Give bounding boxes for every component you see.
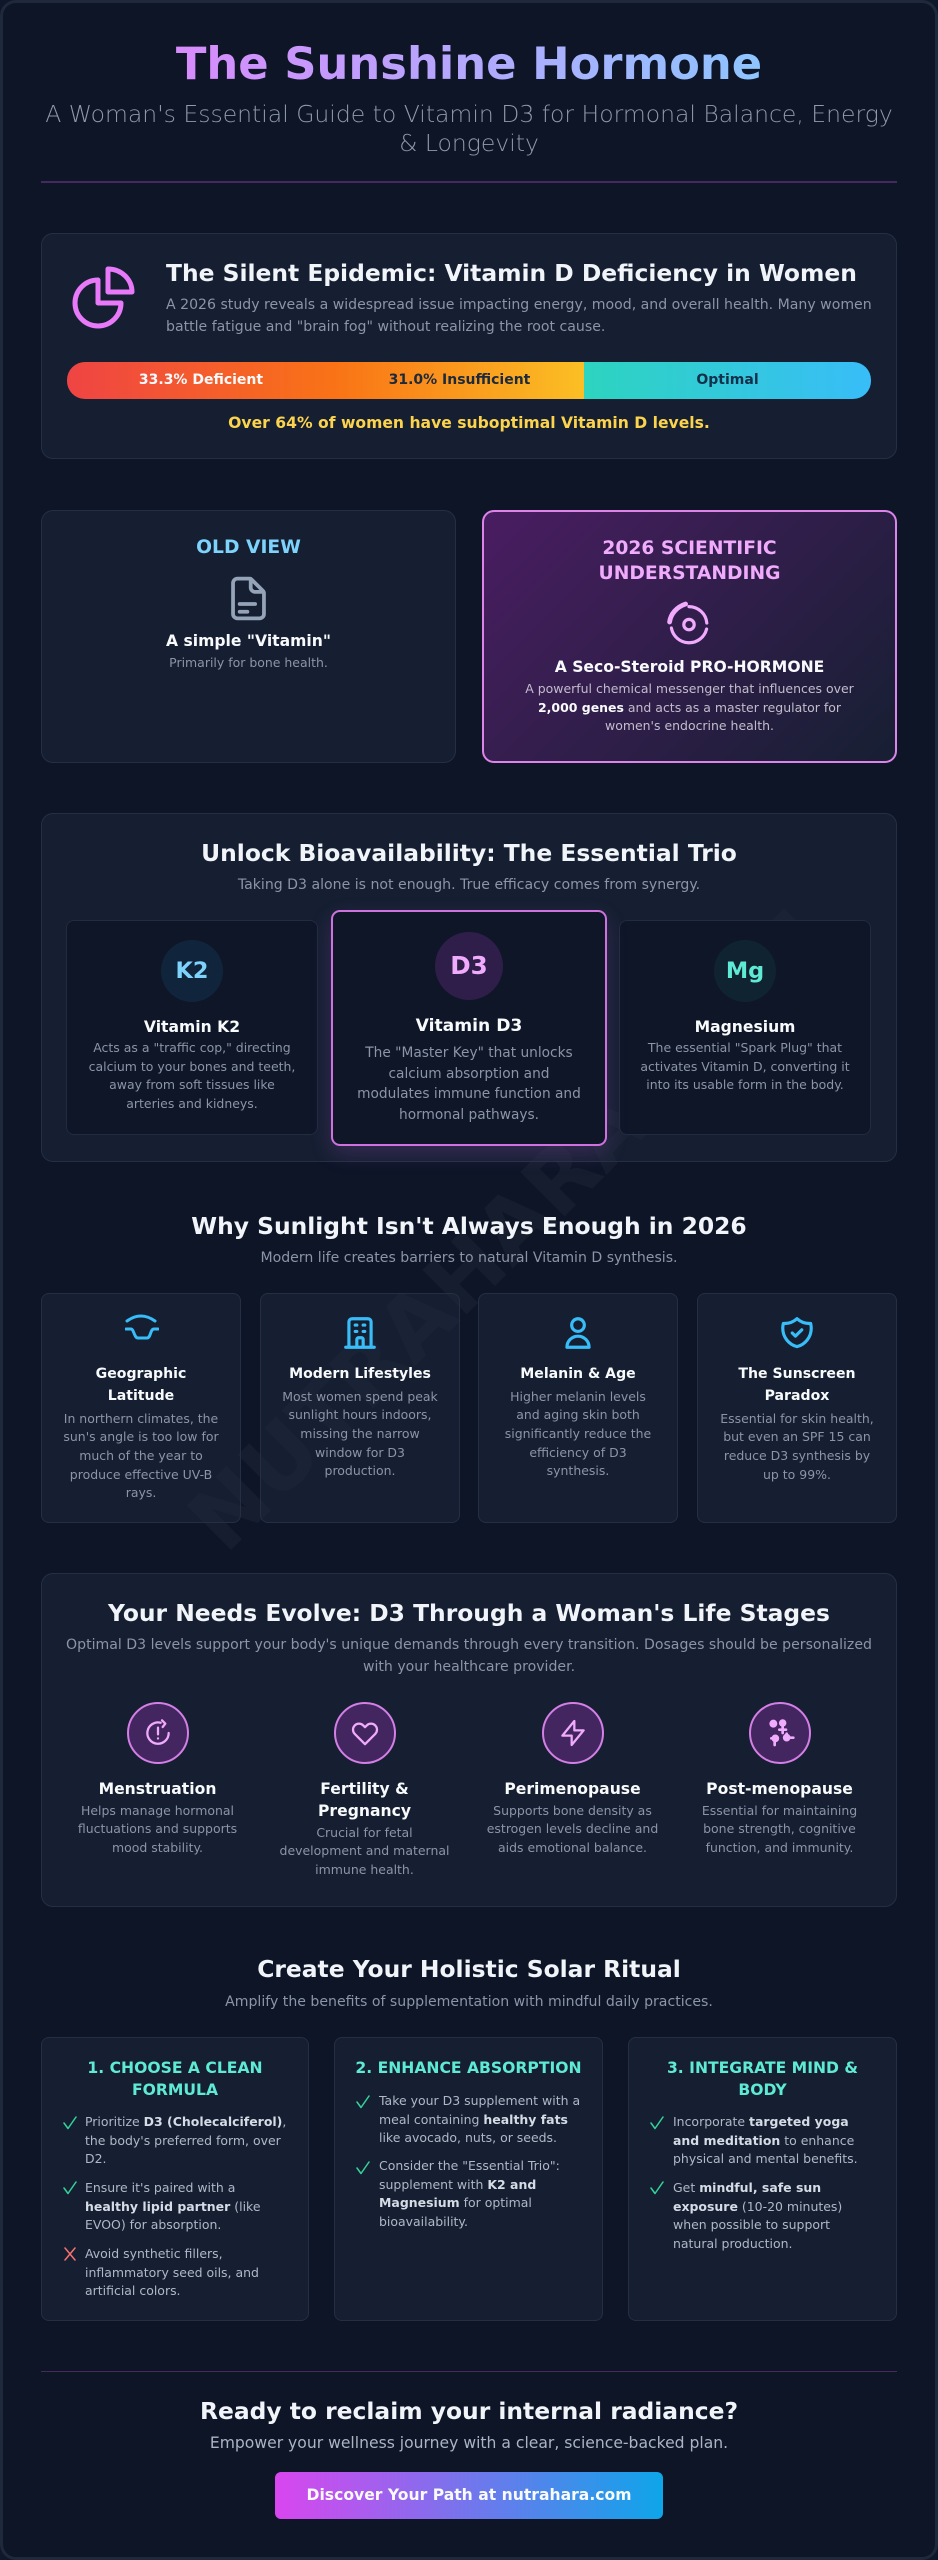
text: melanin description: Higher melanin levels [510,1388,646,1404]
card: geographic latitude [41,1293,241,1523]
heading: solar ritual: Create Your Holistic Solar Ritual [257,1955,681,1983]
bar segment: deficient: 33.3% Deficient [139,372,263,388]
text: lifestyles description: production. [325,1463,395,1478]
list item: essential trio: bioavailability. [379,2214,468,2229]
heading: simple vitamin: A simple "Vitamin" [166,632,331,650]
bar segment: insufficient: 31.0% Insufficient [389,372,530,388]
subtitle: & Longevity [399,128,539,156]
text: latitude description: sun's angle is too low for [63,1429,219,1444]
text: post-menopause description [702,1802,857,1855]
text: epidemic description [166,297,872,335]
bar segment: insufficient [335,362,584,399]
list item: prioritize D3: D2. [85,2151,106,2166]
subtitle [45,100,893,156]
icon: hormone target [667,602,708,644]
text: pro-hormone description: A powerful chemical messenger that influences over [525,681,854,696]
text: epidemic description: A 2026 study reveals a widespread issue impacting energy, mood, and overall health. Many women [166,297,872,313]
heading: step 2: 2. ENHANCE ABSORPTION [355,2059,582,2077]
list item: sun exposure: natural production. [673,2236,792,2251]
heading: melanin and age: Melanin & Age [520,1366,636,1382]
icon: document [231,576,266,620]
text: trio subtitle: Taking D3 alone is not enough. True efficacy comes from synergy. [238,877,700,893]
stage: fertility and pregnancy [280,1702,449,1877]
text: D3 description [357,1045,581,1123]
icon: shield check [781,1317,813,1348]
text: menstruation description: Helps manage hormonal [81,1802,234,1818]
text: perimenopause description: aids emotional balance. [498,1840,647,1855]
icon: Mg badge [714,940,776,1002]
heading: modern lifestyles: Modern Lifestyles [289,1366,431,1382]
text: lifestyles description: Most women spend peak [282,1388,438,1404]
card: sunscreen paradox [697,1293,897,1523]
panel: essential trio [41,813,897,1162]
text: perimenopause description: estrogen levels decline and [487,1821,658,1836]
heading: old view: OLD VIEW [196,537,301,558]
icon: D3 badge [435,932,503,1000]
heading: sunscreen paradox: Paradox [765,1388,829,1404]
text: latitude description: produce effective UV-B [70,1467,212,1482]
stage: menstruation [78,1702,237,1855]
icon: check [63,2181,77,2194]
icon: latitude [125,1314,159,1340]
card: integrate mind and body [628,2037,897,2321]
card: enhance absorption [334,2037,603,2321]
icon: heart [334,1702,396,1764]
text: sunscreen description: but even an SPF 15 can [723,1429,871,1444]
text: latitude description: much of the year to [79,1448,203,1463]
text: fertility description [280,1824,449,1877]
text: pro-hormone description [525,681,854,733]
text: D3 description: modulates immune function and [357,1086,581,1102]
list item: healthy fats: Take your D3 supplement with a [379,2093,580,2108]
card: magnesium [619,920,871,1135]
heading: sunscreen paradox: The Sunscreen [738,1366,856,1382]
checklist: mind and body [628,2037,897,2321]
icon: check [63,2116,77,2130]
card: vitamin K2 [66,920,318,1135]
text: D3 description: The "Master Key" that unlocks [365,1045,573,1061]
text: D3 description: hormonal pathways. [399,1107,539,1123]
icon: pie chart [72,266,134,328]
icon: bone cells [749,1702,811,1764]
text: pro-hormone description: women's endocrine health. [605,718,774,733]
text: lifestyles description [282,1388,438,1478]
heading: silent epidemic: The Silent Epidemic: Vitamin D Deficiency in Women [166,259,857,287]
heading: step 3 [628,2057,897,2101]
list item: yoga and meditation: and meditation to enhance [673,2133,854,2148]
watermark: NUTRAHARA.COM [170,891,849,1570]
heading: geographic latitude [96,1366,186,1404]
panel: silent epidemic [41,233,897,459]
text: post-menopause description: Essential for maintaining [702,1802,857,1818]
icon: person [565,1317,591,1349]
list item: lipid partner: healthy lipid partner (like [85,2199,260,2214]
list item: avoid fillers: artificial colors. [85,2283,181,2298]
heading: scientific understanding [599,538,780,584]
text: melanin description: significantly reduce the [505,1426,651,1441]
list item: essential trio [379,2157,560,2232]
icon: check [355,2095,371,2109]
text: melanin description: synthesis. [547,1463,609,1478]
list item: yoga and meditation: Incorporate targeted yoga [673,2114,849,2129]
text: K2 description: Acts as a "traffic cop," directing [93,1040,291,1055]
text: magnesium description: into its usable form in the body. [646,1077,844,1092]
list item: yoga and meditation: physical and mental benefits. [673,2151,858,2166]
text: life stages subtitle [66,1637,872,1675]
icon: D3 badge: D3 [450,951,488,980]
text: K2 description: away from soft tissues like [109,1077,275,1092]
list item: healthy fats [379,2092,580,2148]
icon: lightning bolt [542,1702,604,1764]
heading: post-menopause: Post-menopause [706,1780,853,1798]
title: The Sunshine Hormone [176,37,762,90]
bar segment: optimal [584,362,871,399]
text: magnesium description [640,1040,850,1092]
panel: old view [41,510,456,763]
text: latitude description: rays. [126,1485,156,1500]
text: latitude description: In northern climates, the [64,1410,218,1426]
heading: fertility and pregnancy: Fertility & [320,1780,409,1798]
text: pro-hormone description: 2,000 genes and acts as a master regulator for [538,700,841,715]
checklist: formula [63,2114,286,2298]
list item: lipid partner: EVOO) for absorption. [85,2217,221,2232]
list item: prioritize D3: Prioritize D3 (Cholecalciferol), [85,2114,286,2129]
text: K2 description [89,1040,295,1111]
list item: prioritize D3: the body's preferred form, over [85,2133,281,2148]
text: melanin description: efficiency of D3 [529,1445,627,1460]
heading: call to action: Ready to reclaim your internal radiance? [200,2396,738,2424]
list item: essential trio: Magnesium for optimal [379,2195,532,2210]
panel: 2026 scientific understanding [482,510,897,763]
text: melanin description: and aging skin both [516,1407,640,1422]
heading: step 3: 3. INTEGRATE MIND & [667,2059,858,2077]
card: modern lifestyles [260,1293,460,1523]
text: melanin description [505,1388,651,1478]
text: menstruation description: fluctuations and supports [78,1821,237,1836]
heading: menstruation: Menstruation [99,1780,216,1798]
text: life stages subtitle: with your healthcare provider. [363,1659,575,1675]
list item: prioritize D3 [85,2114,286,2166]
text: sunscreen description: Essential for skin health, [720,1410,874,1426]
icon: check [355,2161,371,2175]
icon: K2 badge: K2 [176,958,208,984]
heading: scientific understanding: UNDERSTANDING [599,562,780,584]
heading: your needs evolve: Your Needs Evolve: D3 Through a Woman's Life Stages [108,1599,830,1627]
list item: healthy fats: like avocado, nuts, or seeds. [379,2130,557,2145]
list item: avoid fillers: inflammatory seed oils, and [85,2265,259,2280]
card: vitamin D3 [331,910,607,1146]
list item: essential trio: supplement with K2 and [379,2177,536,2192]
stage: post-menopause [702,1702,857,1855]
list item: lipid partner [85,2180,260,2232]
text: lifestyles description: missing the narrow [300,1426,420,1441]
card: melanin and age [478,1293,678,1523]
list item: avoid fillers [85,2246,259,2298]
checklist: absorption [356,2093,580,2229]
text: sunlight subtitle: Modern life creates barriers to natural Vitamin D synthesis. [260,1250,678,1266]
text: ritual subtitle: Amplify the benefits of supplementation with mindful daily practices. [225,1994,713,2010]
text: sunscreen description: up to 99%. [763,1467,831,1482]
heading: vitamin K2: Vitamin K2 [144,1018,240,1036]
text: fertility description: development and maternal [280,1843,449,1858]
heading: step 1: FORMULA [132,2081,218,2099]
text: sunscreen description [720,1410,874,1482]
list item: sun exposure: Get mindful, safe sun [673,2180,821,2195]
text: K2 description: arteries and kidneys. [126,1096,258,1111]
heading: perimenopause: Perimenopause [504,1780,641,1798]
text: lifestyles description: window for D3 [315,1445,405,1460]
heading: vitamin D3: Vitamin D3 [416,1016,522,1036]
text: fertility description: Crucial for fetal [316,1824,413,1840]
list item: avoid fillers: Avoid synthetic fillers, [85,2246,223,2261]
icon: cross [64,2247,76,2261]
heading: step 1 [87,2059,263,2099]
heading: scientific understanding: 2026 SCIENTIFIC [602,538,777,558]
text: menstruation description [78,1802,237,1855]
text: perimenopause description [487,1802,658,1855]
heading: magnesium: Magnesium [695,1018,795,1036]
bar segment: deficient [67,362,335,399]
list item: essential trio: Consider the "Essential Trio": [379,2158,560,2173]
icon: cycle timer [127,1702,189,1764]
text: perimenopause description: Supports bone density as [493,1802,652,1818]
text: magnesium description: activates Vitamin D, converting it [640,1059,850,1074]
card: choose a clean formula [41,2037,309,2321]
subtitle: A Woman's Essential Guide to Vitamin D3 for Hormonal Balance, Energy [45,100,893,128]
heading: step 3: BODY [738,2081,787,2099]
callout: over 64%: Over 64% of women have suboptimal Vitamin D levels. [228,414,710,432]
heading: geographic latitude: Geographic [96,1366,186,1382]
text: lifestyles description: sunlight hours indoors, [288,1407,432,1422]
list item: healthy fats: meal containing healthy fats [379,2112,568,2127]
list item: yoga and meditation [673,2113,858,2169]
heading: step 1: 1. CHOOSE A CLEAN [87,2059,263,2077]
text: bone health: Primarily for bone health. [169,655,328,670]
heading: pro-hormone: A Seco-Steroid PRO-HORMONE [555,658,824,676]
bar segment: optimal: Optimal [696,372,759,388]
heading: unlock bioavailability: Unlock Bioavailability: The Essential Trio [201,839,737,867]
icon: Mg badge: Mg [726,958,764,984]
text: epidemic description: battle fatigue and "brain fog" without realizing the root cause. [166,319,605,335]
button: discover your path [275,2472,663,2519]
text: magnesium description: The essential "Spark Plug" that [648,1040,842,1055]
heading: sunscreen paradox [738,1366,856,1404]
panel: life stages [41,1573,897,1907]
list item: sun exposure: when possible to support [673,2217,830,2232]
heading: geographic latitude: Latitude [108,1388,174,1404]
text: call to action subtitle: Empower your wellness journey with a clear, science-backed plan. [210,2434,728,2452]
text: D3 description: calcium absorption and [388,1066,550,1082]
list item: sun exposure: exposure (10-20 minutes) [673,2199,842,2214]
heading: fertility and pregnancy [318,1780,411,1820]
text: sunscreen description: reduce D3 synthesis by [724,1448,870,1463]
text: fertility description: immune health. [315,1862,414,1877]
heading: why sunlight: Why Sunlight Isn't Always Enough in 2026 [191,1212,747,1240]
icon: check [649,2116,665,2130]
button: discover your path: Discover Your Path at nutrahara.com [307,2486,631,2504]
icon: check [649,2181,665,2195]
list item: sun exposure [673,2179,842,2254]
icon: building [344,1317,376,1349]
heading: fertility and pregnancy: Pregnancy [318,1802,411,1820]
text: post-menopause description: bone strength, cognitive [703,1821,856,1836]
stage: perimenopause [487,1702,658,1855]
text: post-menopause description: function, and immunity. [706,1840,853,1855]
icon: K2 badge [161,940,223,1002]
text: menstruation description: mood stability. [112,1840,203,1855]
stacked bar: vitamin D status [67,362,871,399]
text: K2 description: calcium to your bones and teeth, [89,1059,295,1074]
list item: lipid partner: Ensure it's paired with a [85,2180,235,2195]
text: latitude description [63,1410,219,1500]
text: life stages subtitle: Optimal D3 levels support your body's unique demands through every transition. Dosages should be personalized [66,1637,872,1653]
